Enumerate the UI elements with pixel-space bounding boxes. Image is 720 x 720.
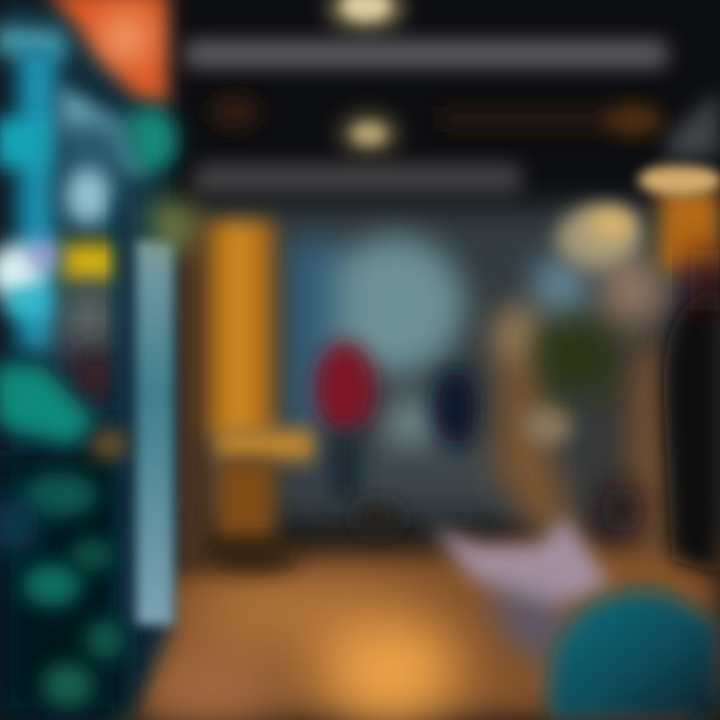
left column: dark backing panel [0,0,170,720]
foreground teal sleeve [548,591,720,720]
left column: teal climbing holds [0,365,128,707]
right side: raised arm, plant and lamp [495,206,672,560]
arm shadow [480,585,570,670]
orange pillar and table [205,220,315,572]
title bar: illegible heading line one [184,40,668,68]
left column: dark lower shade [0,450,130,720]
left column: orange sign at top [46,0,168,105]
floor light pool [140,575,460,720]
back wall teal glow [290,235,510,500]
foreground dark figure at right edge [664,280,720,575]
ceiling amber reflections [209,94,663,135]
figure red accent [690,250,720,310]
right side: lamp and orange shelf [638,90,720,270]
left column: neon blue panels [0,25,194,625]
person in red jacket [315,342,402,533]
foreground arm in lilac sleeve [430,515,610,615]
ceiling lamps [328,0,404,156]
title bar: illegible heading line two [194,164,522,192]
distant person in dark clothes [434,370,478,446]
